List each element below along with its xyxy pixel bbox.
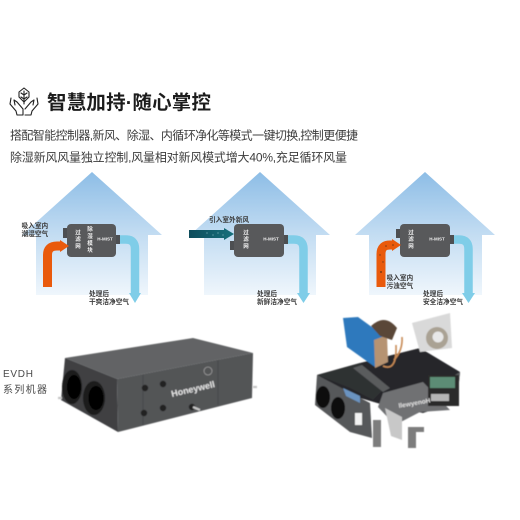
icon: hands holding leaf: [10, 88, 38, 115]
chassis top cover: [378, 382, 450, 425]
unit: filter module: [396, 224, 454, 257]
unit: dehumidifier: 滤: [75, 235, 81, 243]
unit: dehumidifier: 湿: [87, 232, 93, 240]
text block: feature description: [10, 128, 358, 164]
label: output: 处理后: [423, 289, 443, 298]
unit: filter module: 网: [408, 243, 414, 250]
label: intake: 吸入室内: [22, 221, 49, 230]
panel: dehumidify mode house: 干爽洁净空气: [89, 297, 129, 306]
unit: dehumidifier: 网: [75, 243, 81, 250]
unit top: [65, 338, 253, 379]
arrow: humid air inlet: [48, 240, 69, 287]
fan port right: [331, 397, 345, 419]
brand logo: Honeywell: [170, 379, 216, 399]
text block: feature description: 除湿新风风量独立控制,风量相对新风模式增大40%,充足循环风量: [10, 150, 347, 164]
duct: cold air outlet: [118, 240, 135, 294]
arrow: outlet tip: [129, 293, 141, 303]
house shape: [22, 172, 162, 295]
house shape: [190, 172, 330, 295]
panel: dehumidify mode house: 潮湿空气: [22, 229, 49, 238]
side fittings: [58, 387, 257, 410]
unit: dehumidifier: [63, 224, 120, 257]
text block: feature description: 搭配智能控制器,新风、除湿、内循环净化等模式一键切换,控制更便捷: [10, 128, 358, 142]
connector knobs: [141, 381, 195, 416]
control board: [428, 375, 459, 406]
label: product series: 系列机器: [3, 383, 47, 396]
unit: dehumidifier: 过: [75, 228, 81, 236]
unit: filter module: 滤: [243, 235, 249, 243]
product: exploded internal view: [315, 313, 460, 448]
filter sheet: [343, 388, 360, 403]
fan port left: [62, 370, 82, 404]
arrow: polluted air inlet: [379, 239, 401, 287]
arrow: outdoor air inlet: [189, 228, 234, 240]
chassis back floor: [317, 348, 460, 413]
chassis left compartment: [317, 363, 385, 400]
panel: fresh air mode house: 新鲜洁净空气: [257, 297, 297, 306]
unit: filter module: [230, 224, 288, 257]
arrow: outlet tip: [297, 293, 310, 303]
product: EVDH closed unit: [58, 338, 257, 432]
duct: clean air outlet: [452, 240, 468, 294]
title: 智慧加持·随心掌控: [47, 91, 211, 114]
label: output: 处理后: [257, 289, 277, 298]
unit: filter module: 网: [243, 243, 249, 250]
chassis front panel: [315, 375, 372, 438]
light side panel: [385, 408, 402, 440]
panel: dehumidify mode house: [22, 172, 162, 306]
unit: filter module: 过: [243, 228, 249, 236]
duct: fresh air outlet: [286, 240, 304, 294]
blue heat exchanger: [343, 317, 397, 368]
fan assembly: [412, 313, 452, 352]
unit: filter module: H-MIST: [263, 236, 279, 242]
label: intake: 吸入室内: [386, 273, 414, 282]
label: intake: 引入室外新风: [209, 215, 249, 224]
label: product series: EVDH: [3, 369, 33, 380]
house shape: [355, 172, 495, 295]
unit: dehumidifier: 模: [87, 239, 93, 247]
panel: indoor circulation house: [355, 172, 495, 306]
fan port right: [83, 381, 105, 415]
label: product series: [3, 369, 47, 396]
copper pipes: [383, 337, 402, 367]
arrow: outlet tip: [462, 293, 475, 303]
inner divider: [353, 365, 390, 392]
panel: fresh air mode house: [189, 172, 330, 306]
unit left side: [61, 358, 118, 432]
front seams: [143, 360, 218, 425]
chassis right panel: [428, 372, 460, 410]
unit: filter module: 滤: [408, 235, 414, 243]
unit front side: [117, 353, 253, 432]
white cutout: [355, 413, 362, 425]
status emblem: [204, 367, 212, 375]
panel: indoor circulation house: 安全洁净空气: [423, 297, 463, 306]
unit: dehumidifier: 除: [87, 225, 93, 233]
unit: dehumidifier: H-MIST: [97, 236, 113, 242]
panel: indoor circulation house: 污浊空气: [386, 281, 414, 290]
unit: dehumidifier: 块: [87, 246, 93, 254]
unit: filter module: H-MIST: [429, 236, 445, 242]
chassis legs: [373, 420, 424, 448]
label: output: 处理后: [89, 289, 109, 298]
fan port left: [316, 386, 330, 408]
unit: filter module: 过: [408, 228, 414, 236]
brand logo: llewyenoH: [398, 397, 431, 410]
